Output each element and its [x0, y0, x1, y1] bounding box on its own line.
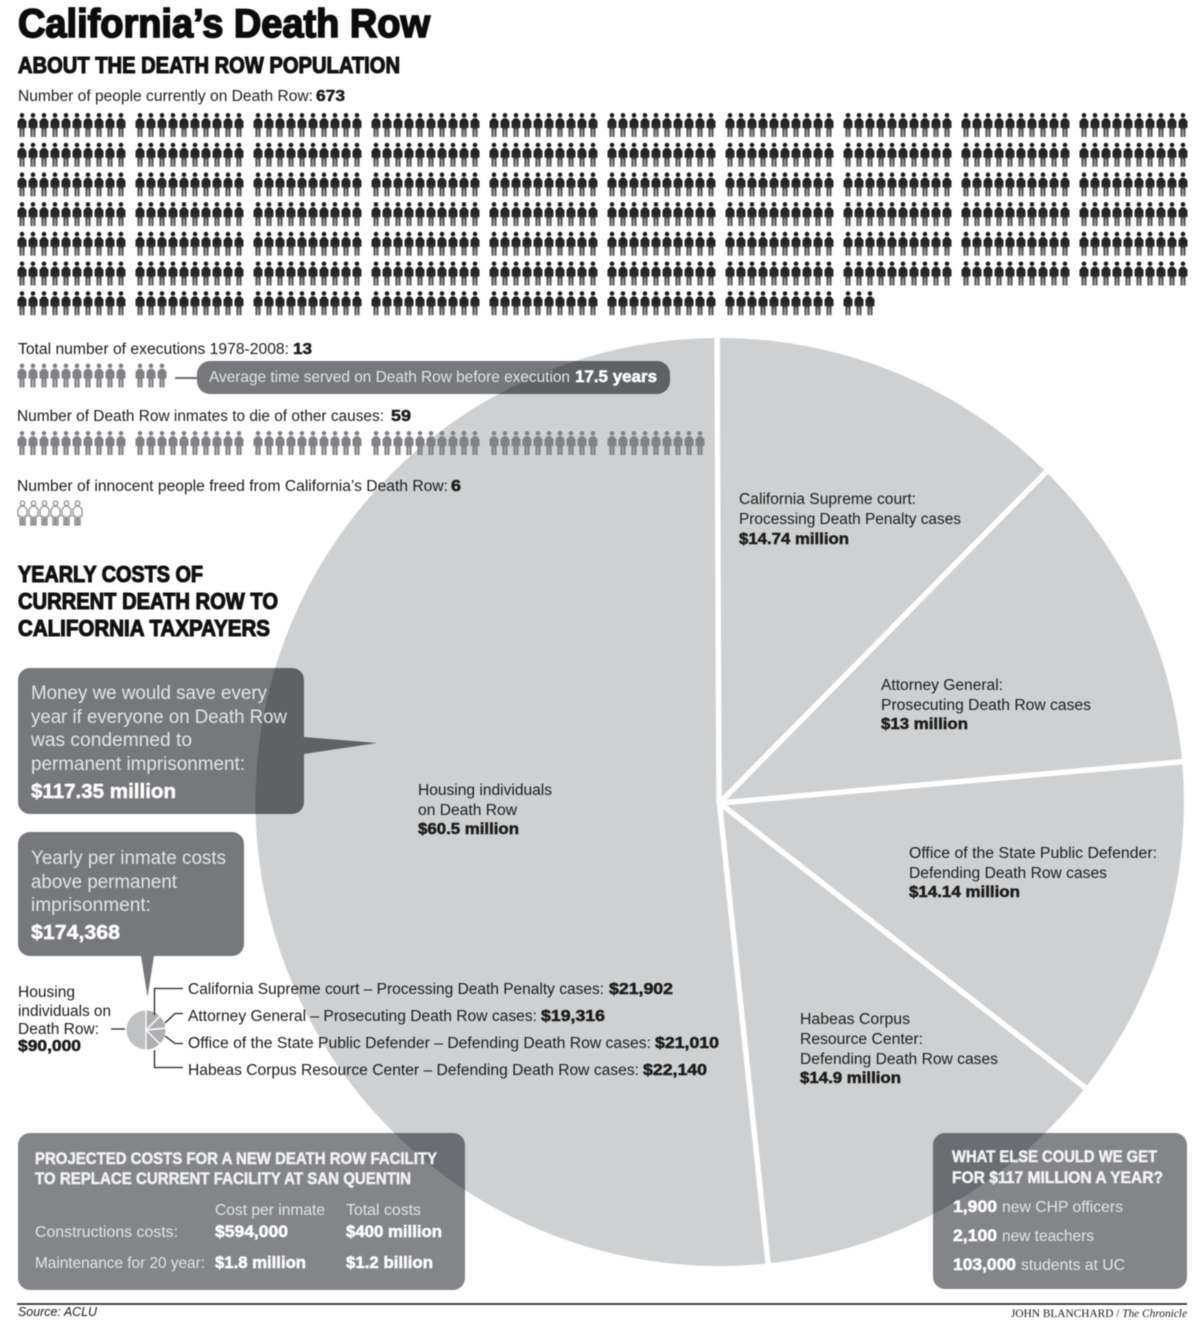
panel: projected costs for new facility: $594,000	[215, 1222, 288, 1241]
text: housing per inmate: Death Row:	[18, 1021, 99, 1038]
panel: what else could we get: new teachers	[1002, 1228, 1094, 1245]
pie label: supreme court: Processing Death Penalty cases	[739, 511, 961, 528]
source credit: Source: ACLU	[18, 1304, 98, 1319]
heading: yearly costs	[18, 561, 278, 641]
callout: average time served: Average time served on Death Row before execution	[209, 369, 570, 386]
callout: per inmate costs	[18, 832, 244, 997]
panel: projected costs for new facility: $1.8 million	[215, 1253, 306, 1272]
pie label: attorney general: Attorney General:	[881, 677, 1003, 694]
panel: what else could we get: FOR $117 MILLION A YEAR?	[952, 1168, 1163, 1187]
panel: what else could we get: 1,900	[953, 1197, 997, 1216]
panel: projected costs for new facility	[18, 1133, 465, 1290]
pie label: habeas corpus: Resource Center:	[800, 1031, 923, 1048]
callout: average time served: 17.5 years	[575, 367, 657, 386]
panel: what else could we get: WHAT ELSE COULD WE GET	[952, 1147, 1158, 1166]
cost breakdown list: Habeas Corpus Resource Center – Defending Death Row cases:	[188, 1062, 639, 1079]
pictogram: 6 innocent people	[18, 501, 82, 525]
text: innocent people freed: 6	[451, 478, 461, 495]
pie label: public defender	[909, 845, 1157, 901]
callout: per inmate costs: Yearly per inmate costs	[31, 848, 226, 869]
pictogram: 59 other deaths	[18, 431, 704, 455]
pie chart: yearly costs	[255, 330, 1190, 1272]
panel: projected costs for new facility: TO REPLACE CURRENT FACILITY AT SAN QUENTIN	[35, 1169, 411, 1188]
callout: average time served	[175, 361, 670, 394]
callout: per inmate costs: $174,368	[31, 922, 120, 944]
connector lines	[111, 988, 183, 1068]
cost breakdown list	[188, 981, 719, 1079]
byline: JOHN BLANCHARD / The Chronicle	[1011, 1308, 1187, 1320]
text: other causes: 59	[391, 408, 411, 425]
text: people on death row count: 673	[316, 88, 345, 105]
panel: what else could we get: 2,100	[953, 1226, 997, 1245]
callout: money saved: year if everyone on Death Row	[31, 707, 287, 728]
callout: money saved	[18, 668, 377, 814]
panel: projected costs for new facility: $1.2 billion	[346, 1253, 433, 1272]
text: housing per inmate: $90,000	[18, 1038, 81, 1055]
pie label: attorney general	[881, 677, 1091, 733]
pie label: attorney general: $13 million	[881, 716, 968, 733]
text: innocent people freed: Number of innocent people freed from California’s Death Row:	[17, 478, 448, 495]
panel: projected costs for new facility: Total costs	[346, 1202, 421, 1219]
panel: projected costs for new facility: PROJECTED COSTS FOR A NEW DEATH ROW FACILITY	[35, 1149, 438, 1168]
text: total executions: Total number of executions 1978-2008:	[18, 341, 289, 358]
title: California’s Death Row	[18, 2, 431, 46]
text: housing per inmate: individuals on	[18, 1003, 111, 1020]
heading: yearly costs: CALIFORNIA TAXPAYERS	[18, 615, 270, 641]
pie label: housing: $60.5 million	[418, 821, 519, 838]
pie label: habeas corpus	[800, 1011, 998, 1087]
pie label: housing: Housing individuals	[418, 782, 552, 799]
pie label: public defender: Office of the State Public Defender:	[909, 845, 1157, 862]
panel: projected costs for new facility: Maintenance for 20 year:	[35, 1255, 205, 1272]
heading: yearly costs: CURRENT DEATH ROW TO	[18, 588, 278, 614]
callout: money saved: was condemned to	[30, 730, 192, 751]
cost breakdown list: $19,316	[541, 1008, 605, 1025]
pie label: habeas corpus: Defending Death Row cases	[800, 1051, 998, 1068]
panel: what else could we get	[933, 1133, 1187, 1289]
callout: per inmate costs: above permanent	[31, 872, 178, 893]
pie label: habeas corpus: $14.9 million	[800, 1070, 901, 1087]
small pie chart	[126, 1010, 166, 1050]
cost breakdown list: $21,902	[609, 981, 673, 998]
panel: projected costs for new facility: Cost per inmate	[215, 1202, 325, 1219]
pie label: supreme court: California Supreme court:	[739, 491, 916, 508]
heading: about the death row population: ABOUT THE DEATH ROW POPULATION	[18, 52, 400, 78]
text: total executions: 13	[293, 341, 312, 358]
panel: projected costs for new facility: $400 million	[346, 1222, 442, 1241]
pictogram: 13 executions	[18, 364, 166, 388]
panel: what else could we get: new CHP officers	[1002, 1199, 1123, 1216]
pie label: supreme court: $14.74 million	[739, 531, 849, 548]
text: housing per inmate	[18, 984, 111, 1055]
pie label: attorney general: Prosecuting Death Row cases	[881, 697, 1091, 714]
pie label: housing	[418, 782, 552, 838]
pie label: public defender: Defending Death Row cases	[909, 865, 1107, 882]
pie label: supreme court	[739, 491, 961, 548]
panel: what else could we get: students at UC	[1021, 1257, 1125, 1274]
pie label: habeas corpus: Habeas Corpus	[800, 1011, 910, 1028]
text: other causes: Number of Death Row inmates to die of other causes:	[17, 408, 384, 425]
text: housing per inmate: Housing	[18, 984, 75, 1001]
pie label: public defender: $14.14 million	[909, 884, 1020, 901]
callout: per inmate costs: imprisonment:	[31, 895, 151, 916]
callout: money saved: Money we would save every	[31, 683, 267, 704]
callout: money saved: $117.35 million	[31, 781, 176, 803]
text: people on death row count: Number of people currently on Death Row:	[18, 88, 313, 105]
cost breakdown list: $21,010	[655, 1035, 719, 1052]
panel: projected costs for new facility: Constructions costs:	[35, 1224, 178, 1241]
cost breakdown list: California Supreme court – Processing Death Penalty cases:	[188, 981, 604, 998]
cost breakdown list: $22,140	[643, 1062, 707, 1079]
heading: yearly costs: YEARLY COSTS OF	[18, 561, 203, 587]
callout: money saved: permanent imprisonment:	[31, 754, 245, 775]
cost breakdown list: Office of the State Public Defender – Defending Death Row cases:	[188, 1035, 651, 1052]
panel: what else could we get: 103,000	[953, 1255, 1016, 1274]
pictogram: 673 people on death row	[18, 113, 1188, 315]
pie label: housing: on Death Row	[418, 802, 518, 819]
cost breakdown list: Attorney General – Prosecuting Death Row cases:	[188, 1008, 537, 1025]
